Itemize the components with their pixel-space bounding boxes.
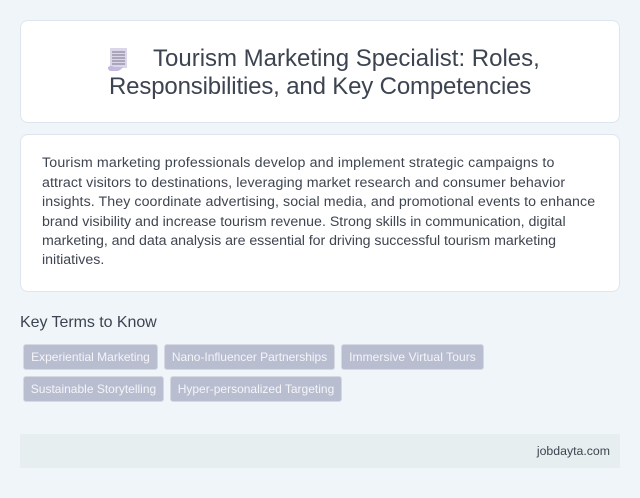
summary paragraph: brand visibility and increase tourism revenue. Strong skills in communication, digital [42,214,566,230]
tag: sustainable storytelling [23,376,164,402]
tag: immersive virtual tours: Immersive Virtual Tours [349,350,476,364]
tag: sustainable storytelling: Sustainable Storytelling [31,382,156,396]
summary paragraph: Tourism marketing professionals develop and implement strategic campaigns to [42,155,554,171]
title line 1: Tourism Marketing Specialist: Roles, [153,45,540,72]
panel: title [20,20,620,123]
tag: experiential marketing: Experiential Marketing [31,350,150,364]
summary paragraph: initiatives. [42,252,104,268]
heading: key terms: Key Terms to Know [20,314,157,331]
tag: nano-influencer partnerships [164,344,335,370]
footer bar [20,434,620,468]
tag: hyper-personalized targeting: Hyper-personalized Targeting [178,382,334,396]
panel: summary [20,134,620,292]
tag: immersive virtual tours [341,344,484,370]
icon: document scroll [108,48,127,71]
summary paragraph: marketing, and data analysis are essential for driving successful tourism marketing [42,233,556,249]
tag: experiential marketing [23,344,158,370]
summary paragraph [42,155,595,268]
tag: hyper-personalized targeting [170,376,342,402]
tag list [23,344,484,402]
footer source: jobdayta.com [537,444,610,458]
summary paragraph: attract visitors to destinations, leveraging market research and consumer behavior [42,175,565,191]
tag: nano-influencer partnerships: Nano-Influencer Partnerships [172,350,327,364]
summary paragraph: insights. They coordinate advertising, social media, and promotional events to enhance [42,194,595,210]
title line 2: Responsibilities, and Key Competencies [109,73,531,100]
